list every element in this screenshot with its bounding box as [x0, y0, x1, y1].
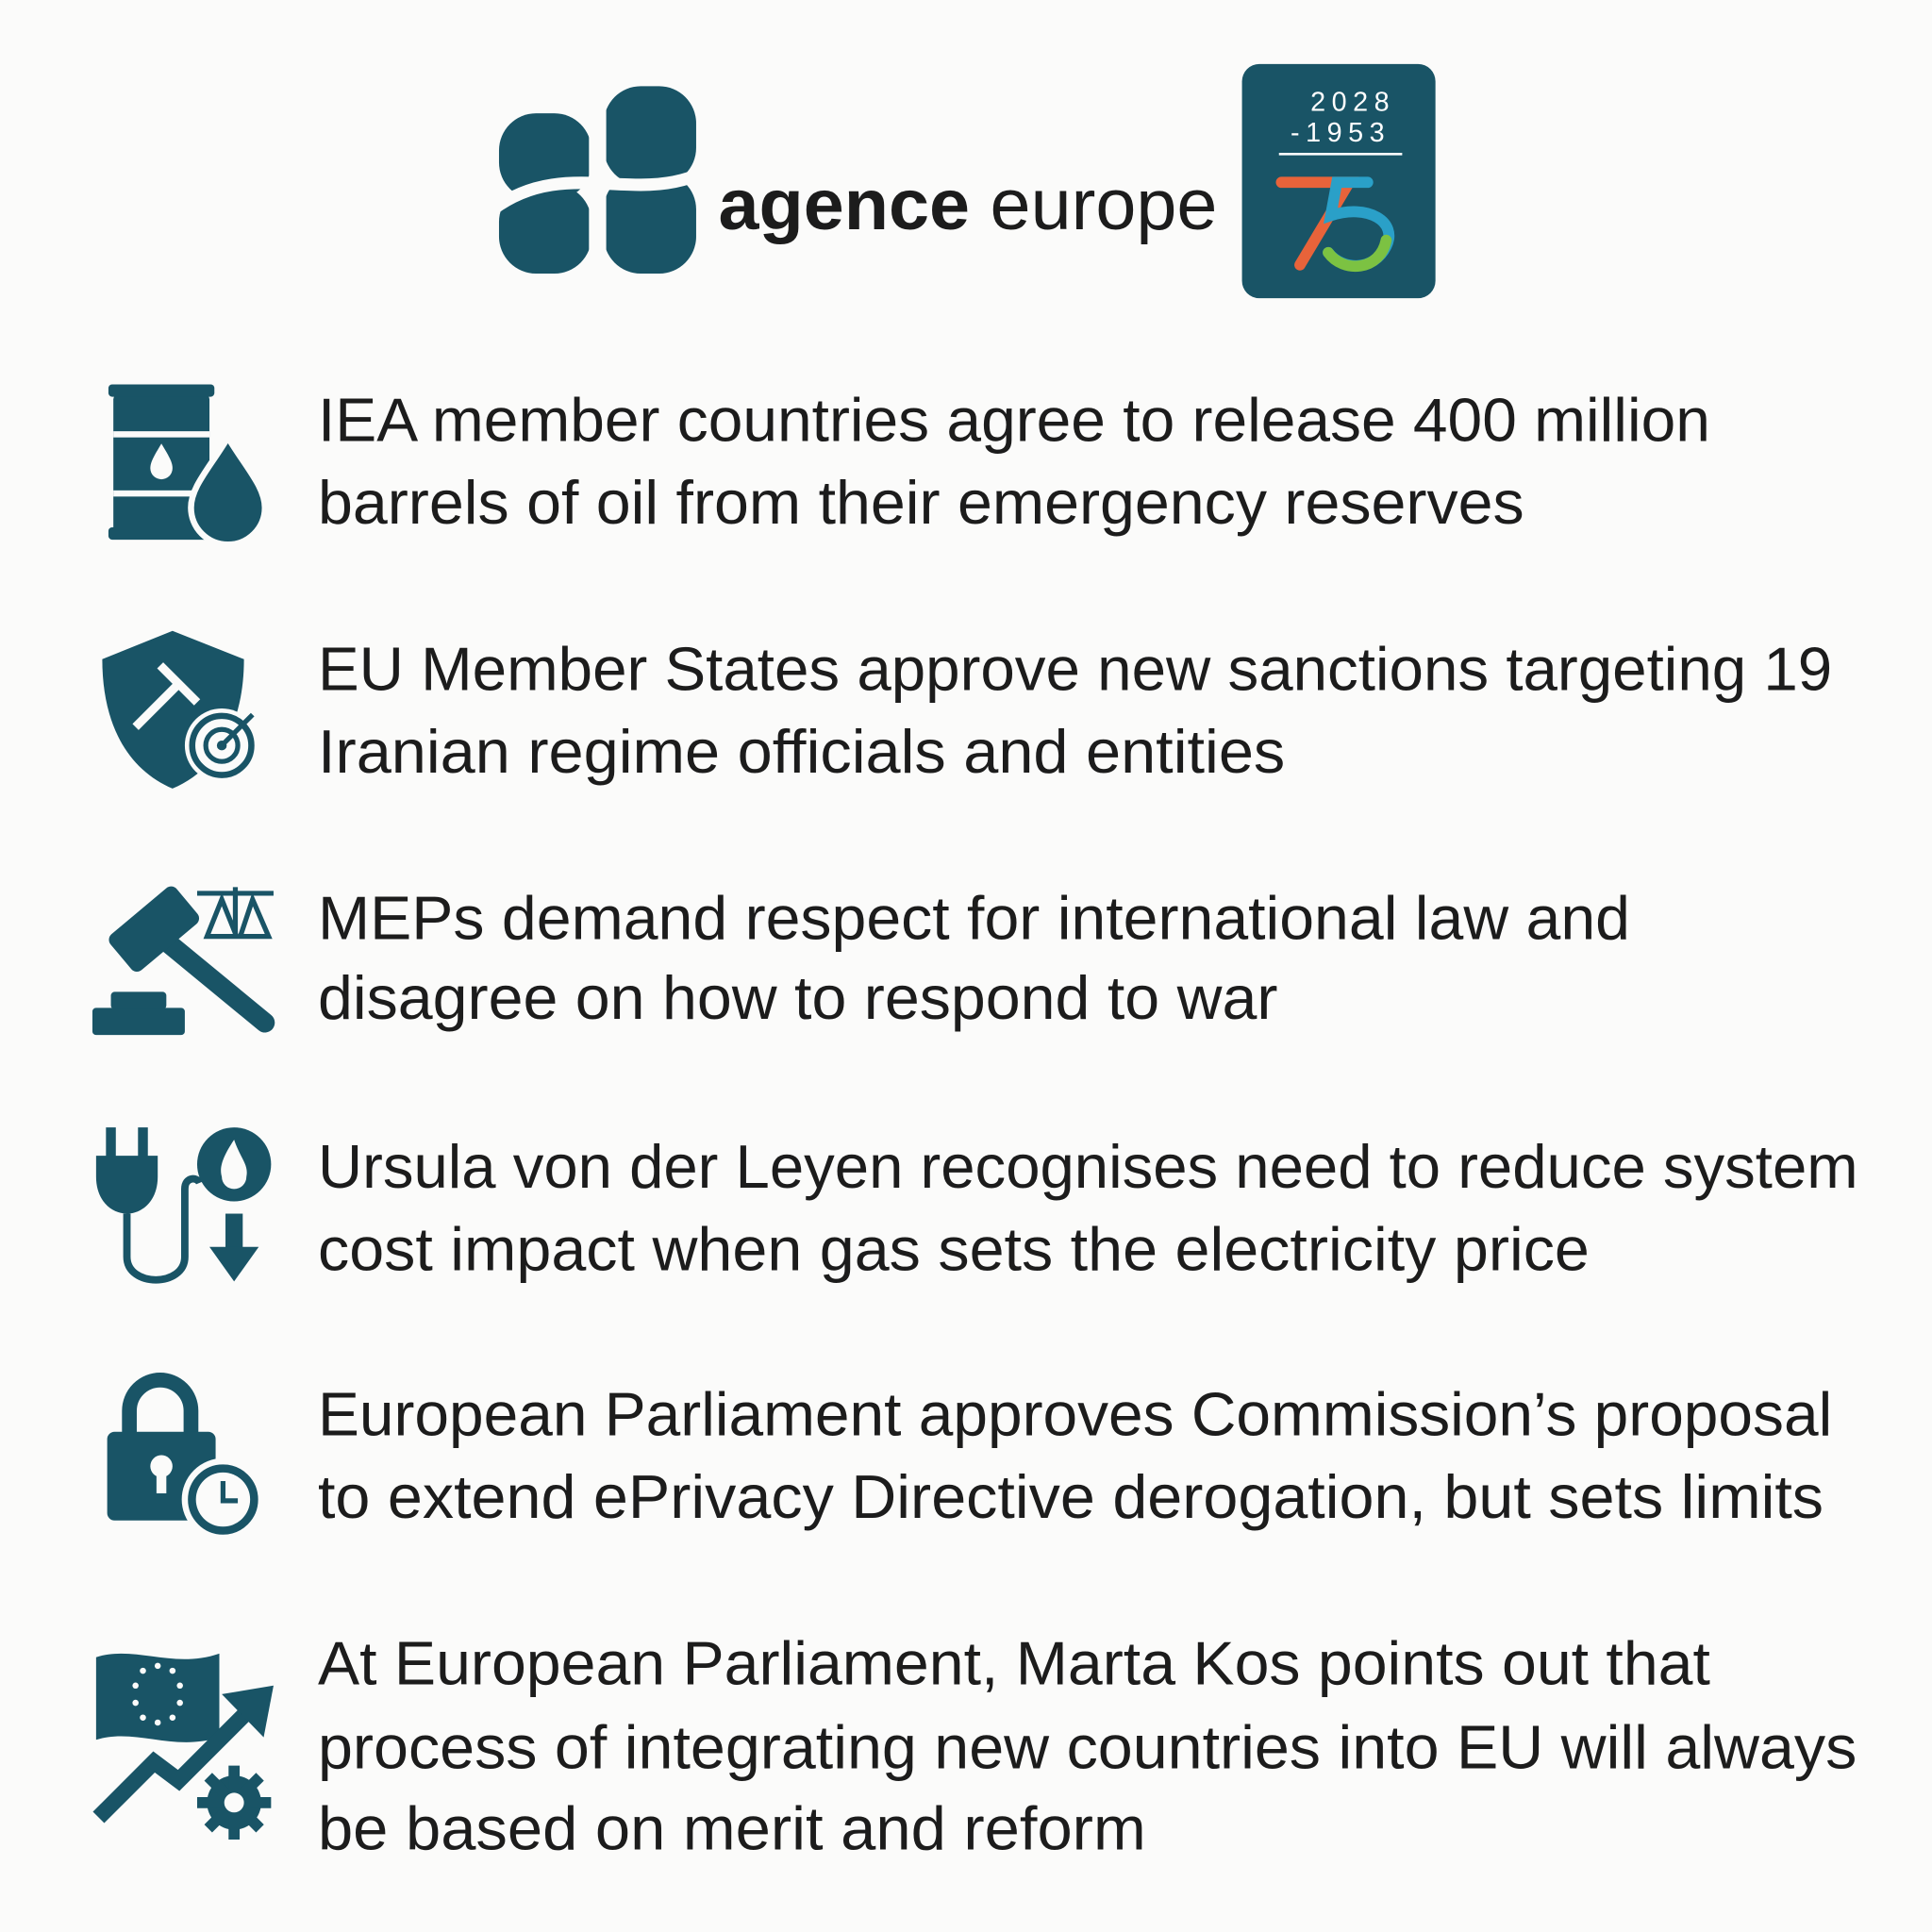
text: von der Leyen electricity: cost impact when gas sets the electricity price — [318, 1215, 1590, 1284]
icon: plug, flame, down arrow — [96, 1127, 271, 1281]
icon: gavel and scales — [92, 883, 274, 1035]
text: von der Leyen electricity — [318, 1132, 1858, 1284]
icon: EU flag, rising arrow, gear — [96, 1654, 274, 1840]
text: ePrivacy: European Parliament approves Commission’s proposal — [318, 1380, 1832, 1449]
text: sanctions: EU Member States approve new sanctions targeting 19 — [318, 634, 1832, 703]
icon: shield with gavel and target — [102, 631, 258, 789]
text: MEPs international law: disagree on how to respond to war — [318, 963, 1277, 1032]
text: MEPs international law — [318, 883, 1630, 1032]
logo text: agence europe — [718, 165, 1217, 245]
text: sanctions: Iranian regime officials and entities — [318, 717, 1285, 786]
text: sanctions — [318, 634, 1832, 786]
text: IEA oil release — [318, 386, 1710, 537]
text: IEA oil release: IEA member countries agree to release 400 million — [318, 386, 1710, 455]
text: MEPs international law: MEPs demand respect for international law and — [318, 883, 1630, 952]
text: ePrivacy — [318, 1380, 1832, 1531]
75th anniversary badge — [1242, 64, 1436, 298]
text: ePrivacy: to extend ePrivacy Directive derogation, but sets limits — [318, 1462, 1824, 1531]
text: Marta Kos enlargement: process of integrating new countries into EU will always — [318, 1712, 1857, 1781]
text: Marta Kos enlargement: At European Parliament, Marta Kos points out that — [318, 1628, 1710, 1697]
text: Marta Kos enlargement — [318, 1628, 1857, 1862]
75th anniversary badge: 2028 — [1310, 88, 1395, 118]
75th anniversary badge: -1953 — [1291, 118, 1391, 148]
icon: padlock and clock — [108, 1380, 261, 1538]
text: von der Leyen electricity: Ursula von der Leyen recognises need to reduce system — [318, 1132, 1858, 1201]
text: IEA oil release: barrels of oil from their emergency reserves — [318, 468, 1524, 537]
icon: oil barrel and drop — [108, 385, 265, 544]
logo: agence europe mark — [492, 74, 702, 283]
text: Marta Kos enlargement: be based on merit and reform — [318, 1793, 1146, 1862]
